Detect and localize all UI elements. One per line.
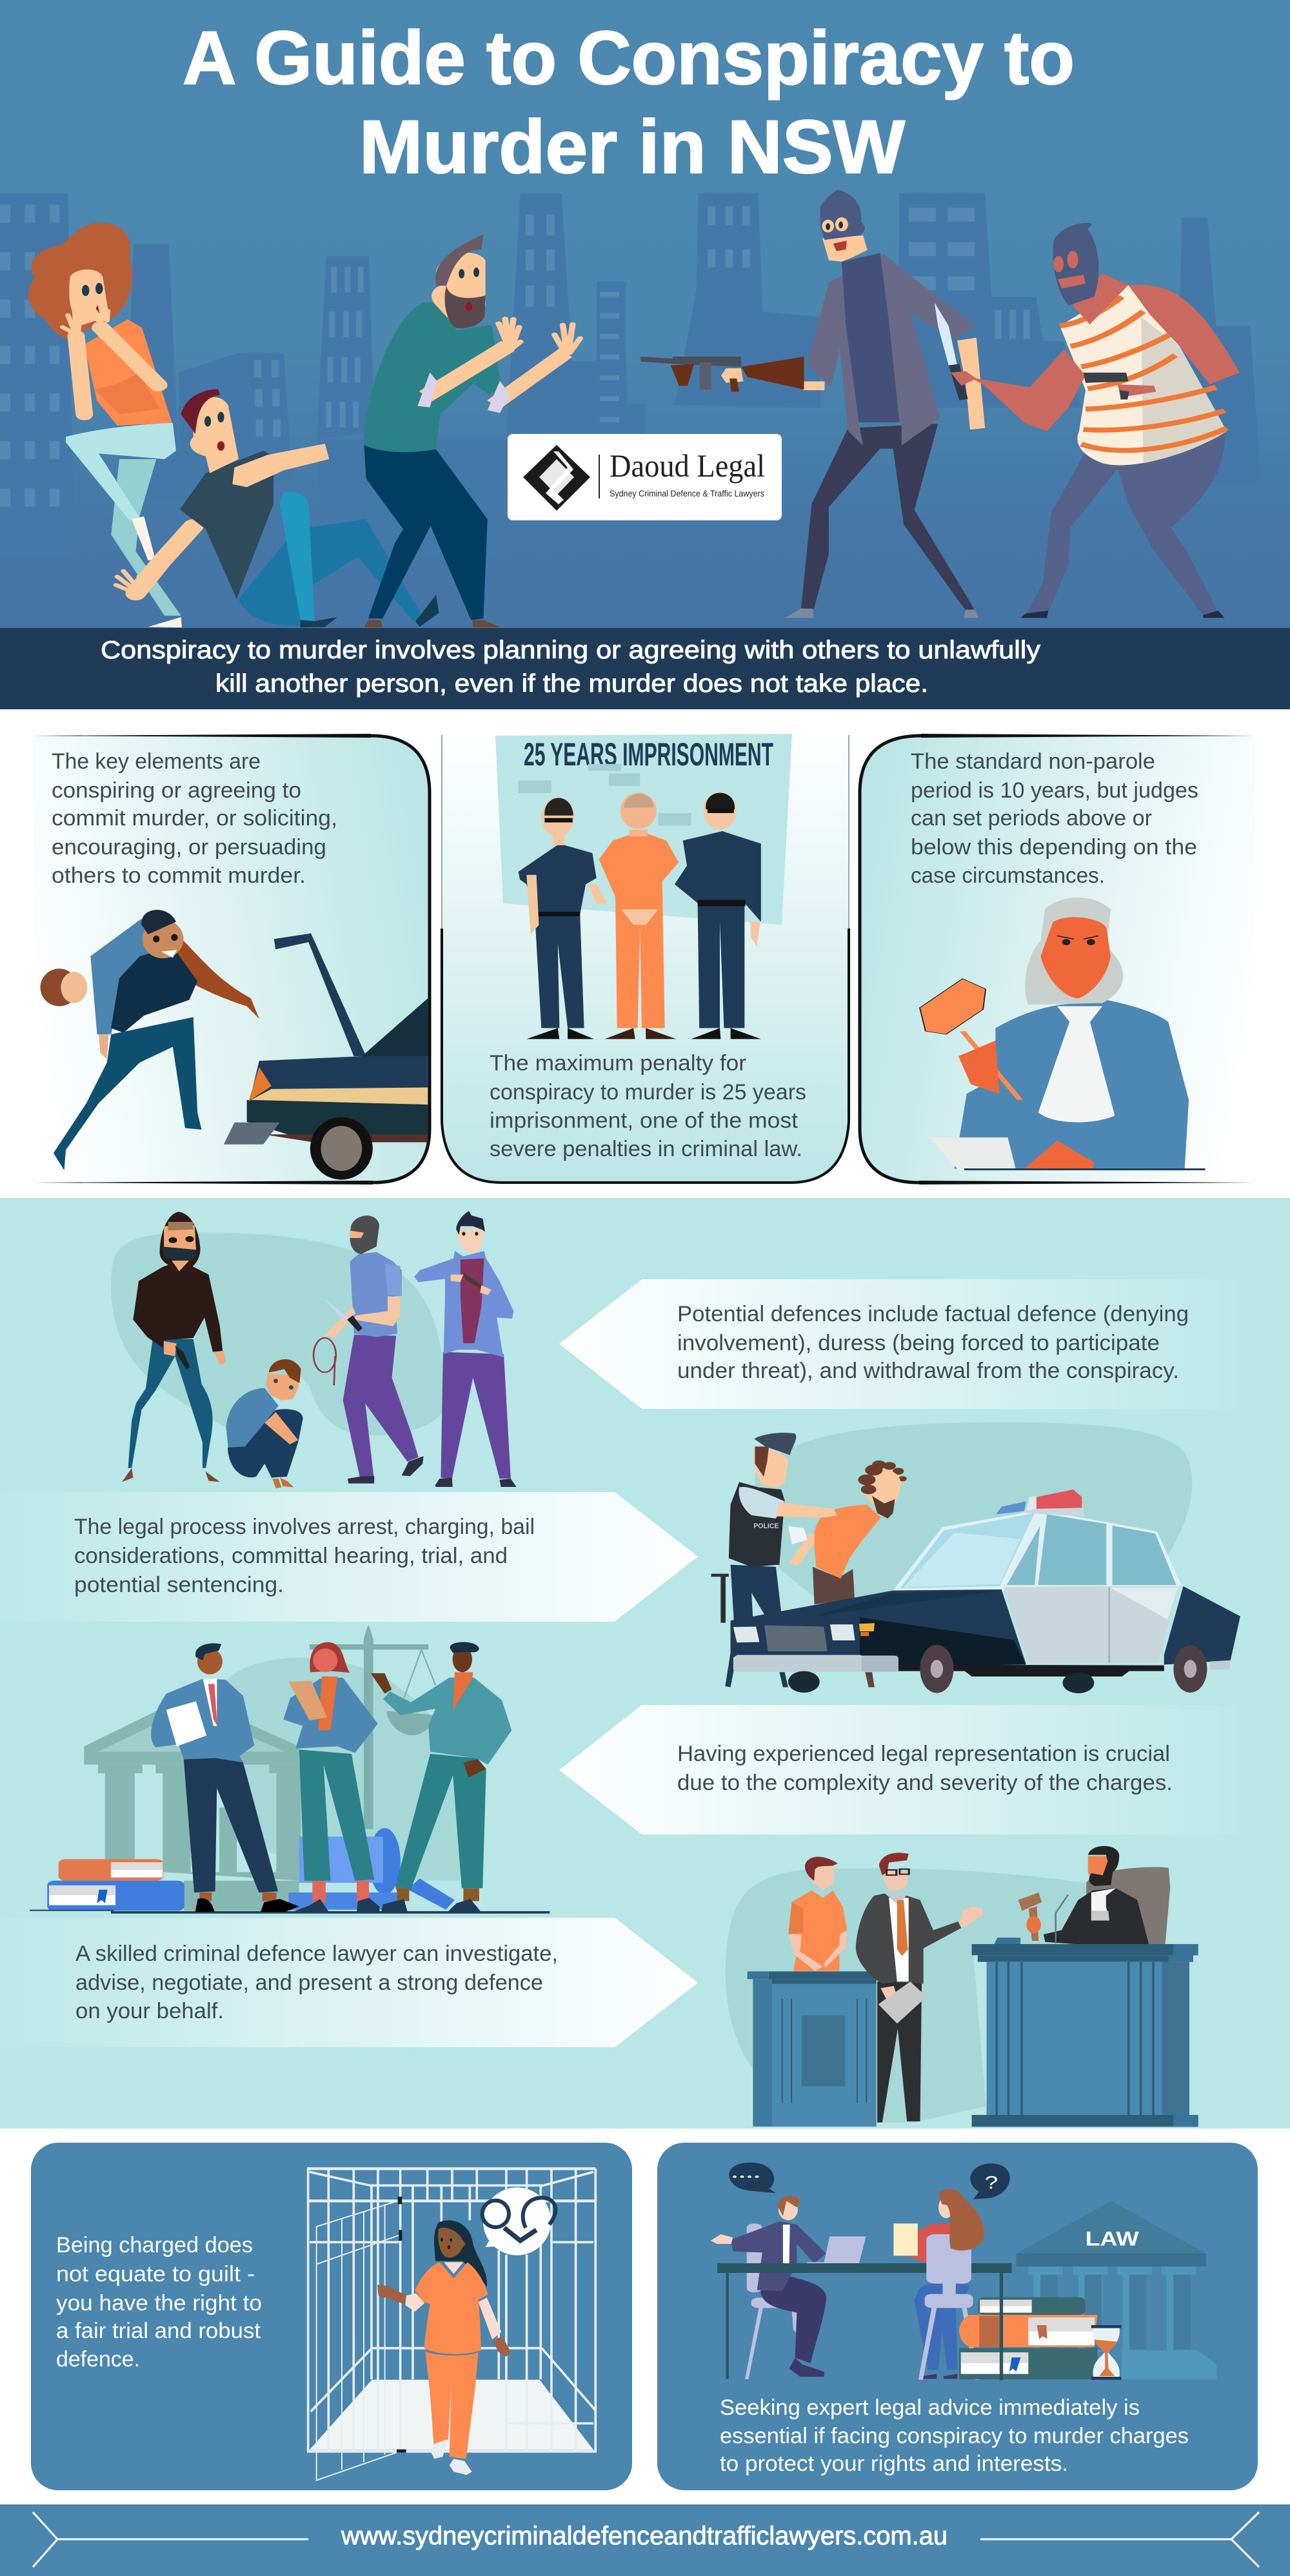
callout: legal process: considerations, committal hearing, trial, and xyxy=(74,1544,508,1568)
illustration: suspects xyxy=(111,1211,517,1488)
illustration: judge xyxy=(920,898,1206,1170)
icon: speech bubble dots xyxy=(729,2163,776,2193)
text: key elements: encouraging, or persuading xyxy=(52,835,326,860)
title: A Guide to Conspiracy to xyxy=(183,15,1075,100)
banner: definition: Conspiracy to murder involves planning or agreeing with others to unlawfully xyxy=(101,636,1041,664)
text: key elements xyxy=(52,749,337,888)
text: maximum penalty: severe penalties in criminal law. xyxy=(490,1137,802,1161)
illustration: lawyer consultation xyxy=(710,2188,1216,2381)
panel: hero background xyxy=(0,0,1290,628)
skyline right xyxy=(619,193,1261,486)
heading: 25 years: 25 YEARS IMPRISONMENT xyxy=(524,736,773,772)
panel: right to fair trial xyxy=(31,2143,632,2490)
illustration: arrest and police car xyxy=(711,1422,1240,1693)
text: seek advice: Seeking expert legal advice immediately is xyxy=(720,2395,1140,2420)
text: maximum penalty: imprisonment, one of the most xyxy=(490,1108,799,1133)
title: Murder in NSW xyxy=(359,104,906,189)
text: non-parole: The standard non-parole xyxy=(911,749,1155,774)
text: being charged: a fair trial and robust xyxy=(56,2319,261,2343)
illustration: robber in striped shirt xyxy=(951,223,1240,618)
callout: potential defences: Potential defences include factual defence (denying xyxy=(677,1302,1189,1326)
text: non-parole: period is 10 years, but judges xyxy=(911,778,1198,803)
panel: non-parole period xyxy=(860,734,1255,1185)
illustration: arrest and police car: POLICE xyxy=(753,1522,779,1530)
banner: definition xyxy=(0,628,1290,709)
icon: speech bubble question: ? xyxy=(985,2172,998,2192)
text: seek advice xyxy=(720,2395,1189,2476)
text: being charged: you have the right to xyxy=(56,2291,262,2315)
text: key elements: conspiring or agreeing to xyxy=(52,778,301,803)
text: maximum penalty: conspiracy to murder is 25 years xyxy=(490,1080,806,1105)
panel: maximum penalty xyxy=(442,734,849,1183)
panel: teal section background xyxy=(0,1198,1290,2129)
text: maximum penalty: The maximum penalty for xyxy=(490,1051,746,1076)
illustration: robber with gun xyxy=(640,190,985,618)
callout: legal process xyxy=(0,1492,698,1622)
callout: legal process: The legal process involves arrest, charging, bail xyxy=(74,1515,535,1539)
text: non-parole: case circumstances. xyxy=(911,863,1105,888)
text: key elements: commit murder, or soliciting, xyxy=(52,806,337,831)
text: key elements: The key elements are xyxy=(52,749,261,774)
footer: website bar xyxy=(0,2504,1290,2576)
illustration: frightened woman xyxy=(28,223,182,627)
text: key elements: others to commit murder. xyxy=(52,863,306,888)
text: being charged: not equate to guilt - xyxy=(56,2262,255,2286)
text: non-parole xyxy=(911,749,1198,888)
callout: potential defences: under threat), and withdrawal from the conspiracy. xyxy=(677,1359,1179,1383)
footer: website bar: www.sydneycriminaldefenceandtrafficlawyers.com.au xyxy=(341,2522,948,2550)
callout: skilled lawyer: advise, negotiate, and present a strong defence xyxy=(75,1971,543,1995)
text: non-parole: can set periods above or xyxy=(911,806,1152,831)
title xyxy=(183,15,1075,189)
callout: legal representation: Having experienced legal representation is crucial xyxy=(677,1742,1170,1766)
icon: speech bubble question xyxy=(970,2163,1010,2199)
text: non-parole: below this depending on the xyxy=(911,835,1197,860)
illustration: fallen man xyxy=(116,389,439,627)
callout: legal representation xyxy=(559,1705,1242,1834)
text: seek advice: essential if facing conspiracy to murder charges xyxy=(720,2424,1189,2448)
illustration: courtroom xyxy=(726,1846,1198,2127)
callout: potential defences: involvement), duress (being forced to participate xyxy=(677,1331,1160,1355)
text: being charged: defence. xyxy=(56,2347,140,2372)
logo: Daoud Legal: Daoud Legal xyxy=(610,447,765,484)
text: maximum penalty xyxy=(490,1051,806,1161)
banner: definition: kill another person, even if the murder does not take place. xyxy=(215,670,928,698)
callout: skilled lawyer xyxy=(0,1918,698,2047)
text: seek advice: to protect your rights and interests. xyxy=(720,2452,1068,2476)
panel: seek legal advice xyxy=(657,2143,1258,2490)
illustration: woman leaving cage xyxy=(307,2168,597,2481)
illustration: prisoner with officers xyxy=(519,764,761,1039)
panel: key elements xyxy=(33,734,430,1185)
logo: Daoud Legal: Sydney Criminal Defence & Traffic Lawyers xyxy=(610,488,764,498)
skyline left xyxy=(0,193,645,557)
text: being charged xyxy=(56,2233,262,2372)
callout: skilled lawyer: A skilled criminal defence lawyer can investigate, xyxy=(75,1942,558,1966)
callout: skilled lawyer: on your behalf. xyxy=(75,1999,224,2023)
illustration: kidnapper and car xyxy=(40,910,428,1179)
callout: potential defences xyxy=(559,1279,1242,1409)
callout: legal representation: due to the complexity and severity of the charges. xyxy=(677,1771,1173,1795)
callout: legal process: potential sentencing. xyxy=(74,1573,284,1597)
illustration: lawyers with courthouse xyxy=(30,1625,550,1914)
illustration: bearded man xyxy=(364,234,580,627)
text: being charged: Being charged does xyxy=(56,2233,253,2257)
logo: Daoud Legal xyxy=(508,434,782,520)
illustration: lawyer consultation: LAW xyxy=(1086,2227,1139,2250)
